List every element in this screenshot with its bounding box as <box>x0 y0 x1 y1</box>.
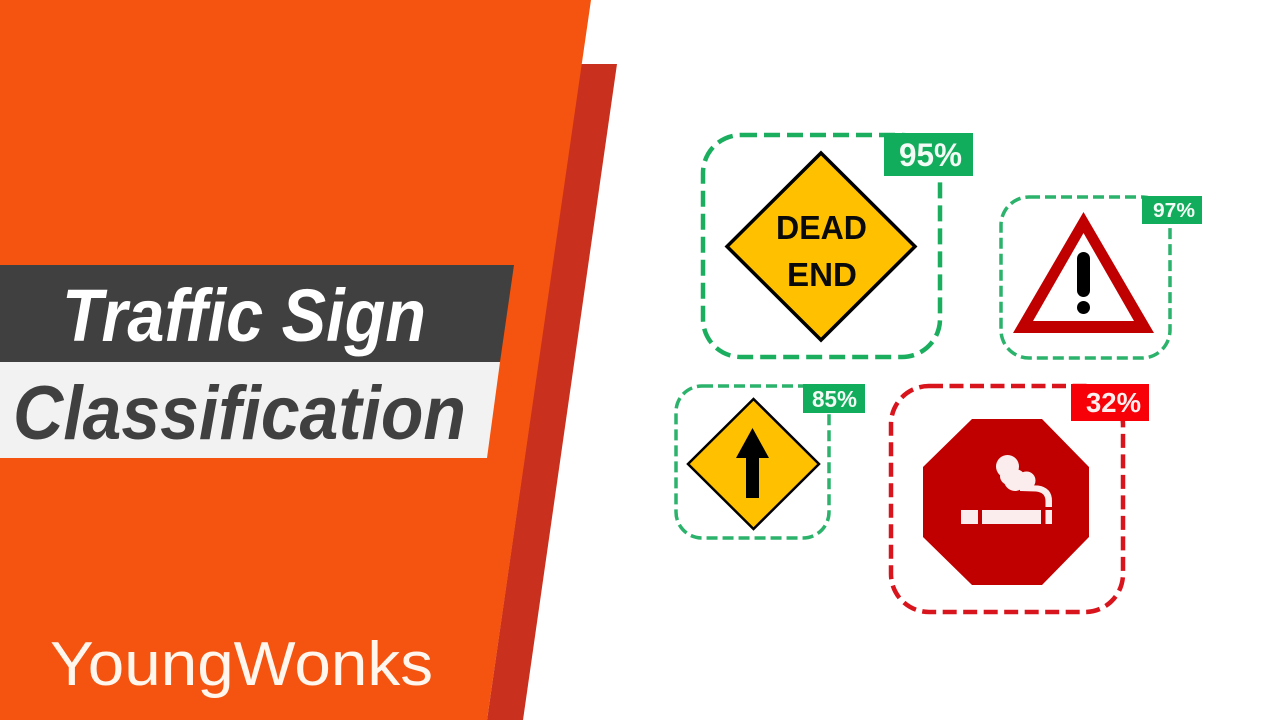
dashed detection box <box>891 386 1123 612</box>
panel: ahead arrow sign detection <box>676 384 865 538</box>
confidence label 97% <box>1142 196 1202 224</box>
icon: dead end diamond sign <box>727 153 915 340</box>
panel: warning sign detection <box>1001 196 1202 358</box>
panel: no smoking sign detection <box>891 384 1149 612</box>
confidence label 85% <box>803 384 865 413</box>
icon: dead end diamond sign: DEAD <box>776 209 867 246</box>
confidence label 95% <box>884 133 973 176</box>
dashed detection box <box>703 135 940 357</box>
dashed detection box <box>1001 197 1170 358</box>
confidence label 32%: 32% <box>1086 387 1141 418</box>
title band: Traffic Sign: Traffic Sign <box>62 274 426 357</box>
confidence label 85%: 85% <box>812 386 857 412</box>
confidence label 97%: 97% <box>1153 200 1195 222</box>
panel: red slanted accent <box>487 64 617 720</box>
icon: warning triangle <box>1013 212 1154 333</box>
title <box>0 265 514 458</box>
confidence label 32% <box>1071 384 1149 421</box>
icon: red octagon with cigarette <box>923 419 1089 585</box>
cigarette <box>961 510 1052 524</box>
panel: orange slanted background <box>0 0 591 720</box>
confidence label 95%: 95% <box>899 137 962 173</box>
icon: yellow diamond with up arrow <box>688 399 819 529</box>
panel: dead end sign detection <box>703 133 973 357</box>
logo: YoungWonks: YoungWonks <box>50 630 433 699</box>
title band: Traffic Sign <box>0 265 514 362</box>
dashed detection box <box>676 386 829 538</box>
icon: dead end diamond sign: END <box>787 256 857 293</box>
smoke <box>996 455 1052 507</box>
title band: Classification: Classification <box>13 371 466 456</box>
